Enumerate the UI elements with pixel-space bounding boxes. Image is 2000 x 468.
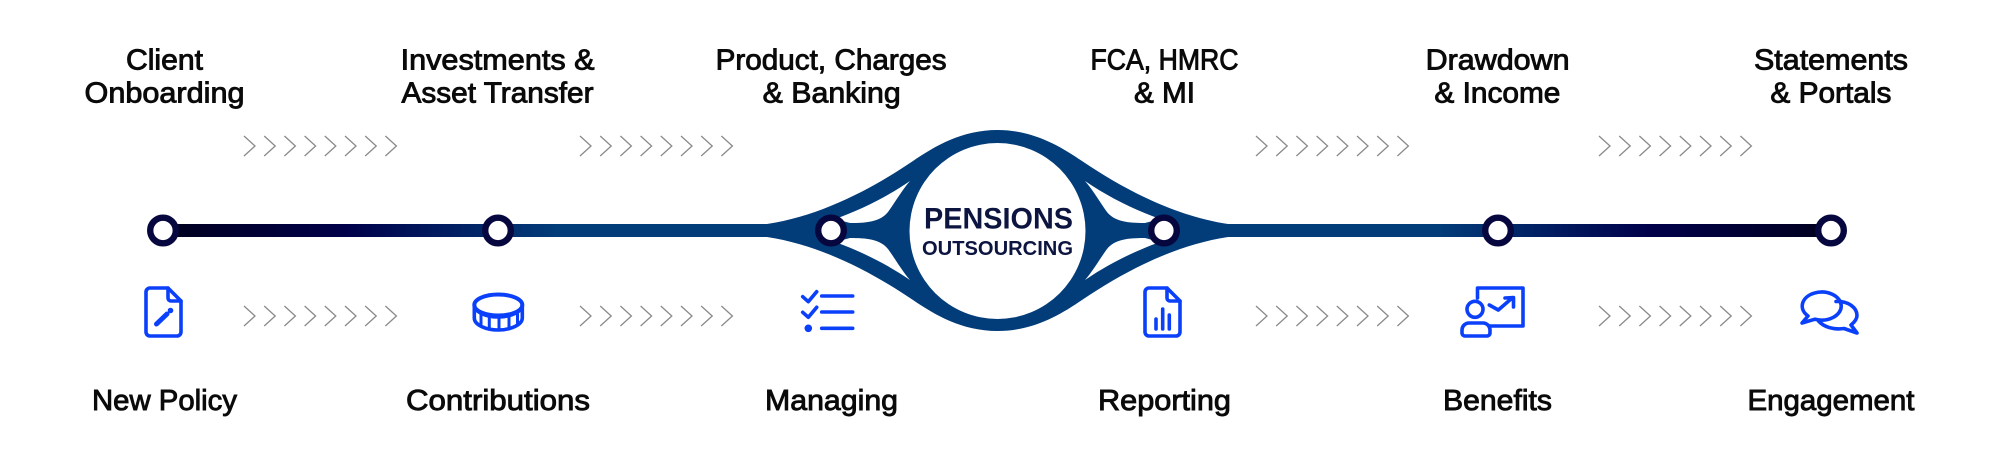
icon: document with pencil: [146, 288, 181, 336]
label: Benefits: Benefits: [1443, 385, 1552, 417]
label: Drawdown & Income: & Income: [1434, 78, 1560, 110]
central hub: pensions outsourcing roundabout: [767, 130, 1228, 331]
top labels: [84, 44, 1908, 110]
label: FCA, HMRC & MI: [1090, 44, 1238, 110]
label: Managing: Managing: [765, 385, 898, 417]
chevron arrows: top row: [244, 136, 1751, 156]
icon: report with bar chart: [1145, 288, 1180, 336]
label: New Policy: New Policy: [92, 385, 237, 417]
label: Statements & Portals: & Portals: [1770, 78, 1891, 110]
label: Statements & Portals: [1754, 44, 1908, 110]
label: Client Onboarding: Client: [126, 44, 203, 76]
hub centre circle: [910, 143, 1086, 319]
label: Contributions: Contributions: [406, 385, 590, 417]
hub title: OUTSOURCING: [922, 237, 1073, 260]
label: Statements & Portals: Statements: [1754, 44, 1908, 76]
label: Investments & Asset Transfer: Investments &: [401, 44, 595, 76]
hub shape: [767, 130, 1228, 331]
icon: presenter with chart board: [1462, 288, 1523, 336]
icon: speech bubbles: [1802, 292, 1857, 333]
label: Drawdown & Income: Drawdown: [1426, 44, 1570, 76]
label: Reporting: Reporting: [1098, 385, 1231, 417]
hub title: PENSIONS: [924, 202, 1073, 235]
timeline line: left: [163, 224, 783, 237]
timeline line: right: [1212, 224, 1832, 237]
label: Product, Charges & Banking: [716, 44, 947, 110]
label: Product, Charges & Banking: & Banking: [763, 78, 901, 110]
label: Product, Charges & Banking: Product, Charges: [716, 44, 947, 76]
label: Client Onboarding: [84, 44, 244, 110]
label: Drawdown & Income: [1426, 44, 1570, 110]
label: Client Onboarding: Onboarding: [84, 78, 244, 110]
hub title: [922, 202, 1073, 260]
chevron arrows: bottom row: [244, 306, 1751, 326]
bottom labels: [92, 385, 1914, 417]
label: FCA, HMRC & MI: FCA, HMRC: [1090, 44, 1238, 76]
icon: checklist: [803, 292, 853, 330]
icon: coin: [474, 294, 522, 330]
timeline nodes: [150, 218, 1844, 243]
label: Investments & Asset Transfer: Asset Transfer: [402, 78, 594, 110]
label: Engagement: Engagement: [1748, 385, 1914, 417]
label: FCA, HMRC & MI: & MI: [1134, 78, 1195, 110]
label: Investments & Asset Transfer: [401, 44, 595, 110]
hub cutouts: [835, 181, 1160, 280]
